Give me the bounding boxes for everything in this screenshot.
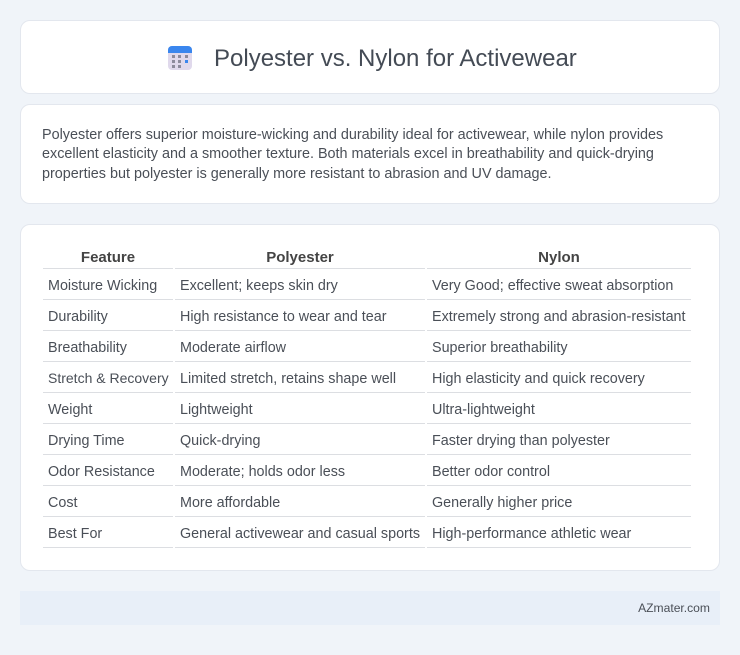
comparison table: Moderate; holds odor less xyxy=(180,464,345,480)
text block: intro: excellent elasticity and a smoother texture. Both materials excel in breathability and quick-drying xyxy=(42,146,654,162)
row: Odor Resistance: Odor Resistance xyxy=(48,464,155,480)
panel: title card xyxy=(20,20,720,94)
comparison table: High resistance to wear and tear xyxy=(180,309,386,325)
header: Polyester: Polyester xyxy=(266,249,334,266)
comparison table: Moderate airflow xyxy=(180,340,286,356)
row: Best For: Best For xyxy=(48,526,102,542)
comparison table xyxy=(43,249,691,548)
row: Weight: Weight xyxy=(48,402,92,418)
comparison table: Very Good; effective sweat absorption xyxy=(432,278,673,294)
row: Moisture Wicking: Moisture Wicking xyxy=(48,278,157,294)
icon: calendar xyxy=(168,46,192,70)
comparison table: Better odor control xyxy=(432,464,550,480)
title: Polyester vs. Nylon for Activewear xyxy=(214,45,577,72)
footer text: AZmater.com xyxy=(638,601,710,615)
comparison table: Ultra-lightweight xyxy=(432,402,535,418)
row: Cost: Cost xyxy=(48,495,78,511)
text block: intro: Polyester offers superior moisture-wicking and durability ideal for activewear, while nylon provides xyxy=(42,126,663,142)
text block: intro: properties but polyester is generally more resistant to abrasion and UV damage. xyxy=(42,166,552,182)
footer bar xyxy=(20,591,720,625)
comparison table: Extremely strong and abrasion-resistant xyxy=(432,309,686,325)
comparison table: General activewear and casual sports xyxy=(180,526,420,542)
comparison table: Excellent; keeps skin dry xyxy=(180,278,338,294)
comparison table: More affordable xyxy=(180,495,280,511)
comparison table: Lightweight xyxy=(180,402,253,418)
comparison table: High elasticity and quick recovery xyxy=(432,371,645,387)
text block: intro xyxy=(42,126,663,182)
comparison table: Superior breathability xyxy=(432,340,568,356)
panel: intro text card xyxy=(20,104,720,204)
row: Breathability: Breathability xyxy=(48,340,127,356)
row: Drying Time: Drying Time xyxy=(48,433,125,449)
comparison table: Limited stretch, retains shape well xyxy=(180,371,396,387)
comparison table: Generally higher price xyxy=(432,495,572,511)
comparison table: Quick-drying xyxy=(180,433,261,449)
header: Feature: Feature xyxy=(81,249,135,266)
panel: comparison table card xyxy=(20,224,720,571)
row: Durability: Durability xyxy=(48,309,108,325)
comparison table: Faster drying than polyester xyxy=(432,433,610,449)
comparison table: High-performance athletic wear xyxy=(432,526,631,542)
row: Stretch & Recovery: Stretch & Recovery xyxy=(48,370,169,386)
header: Nylon: Nylon xyxy=(538,249,580,266)
